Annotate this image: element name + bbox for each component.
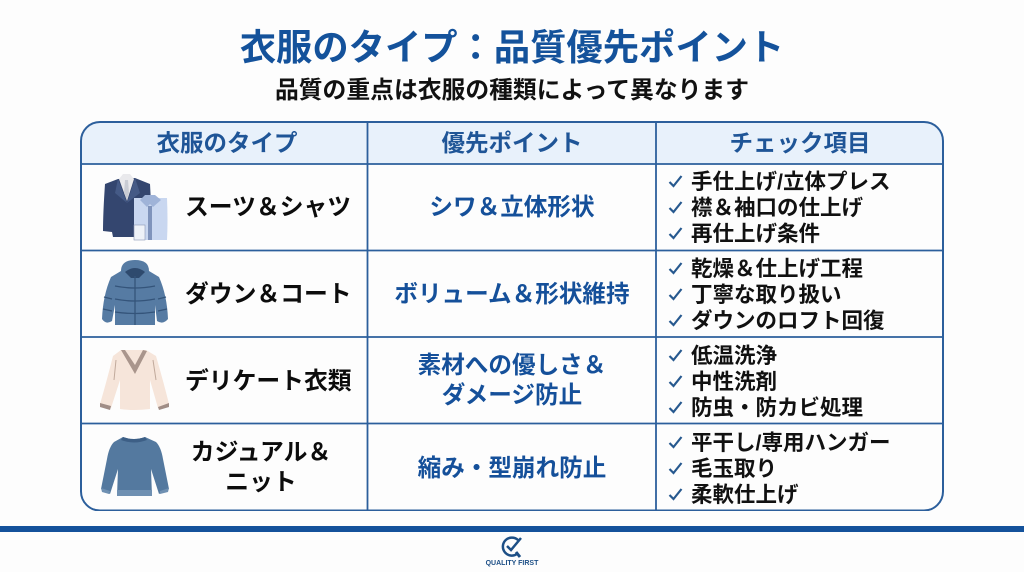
table frame and grid bbox=[80, 121, 944, 511]
title: 衣服のタイプ：品質優先ポイント bbox=[240, 27, 784, 68]
table: garment type quality priorities bbox=[80, 121, 944, 511]
column header: garment type: 衣服のタイプ bbox=[156, 130, 298, 156]
icon: check magnifier bbox=[502, 536, 522, 558]
checklist: down: 乾燥＆仕上げ工程 bbox=[691, 257, 863, 281]
icon: knit sweater bbox=[101, 437, 169, 496]
icon: suit and shirt bbox=[103, 174, 168, 240]
priority: volume and shape retention: ボリューム＆形状維持 bbox=[394, 282, 630, 308]
checklist: down: ダウンのロフト回復 bbox=[691, 309, 885, 333]
checklist: suits bbox=[668, 170, 890, 246]
checklist: suits: 襟＆袖口の仕上げ bbox=[691, 196, 863, 220]
priority: gentleness and damage prevention: 素材への優しさ＆ bbox=[418, 353, 606, 379]
footer bar bbox=[0, 526, 1024, 532]
checklist: delicate: 低温洗浄 bbox=[691, 344, 777, 368]
label: casual and knit: ニット bbox=[225, 469, 297, 496]
label: suits and shirts: スーツ＆シャツ bbox=[185, 194, 351, 221]
icon: down jacket bbox=[102, 260, 168, 325]
checklist: suits: 手仕上げ/立体プレス bbox=[691, 170, 890, 194]
column header: check items: チェック項目 bbox=[730, 130, 870, 156]
subtitle: 品質の重点は衣服の種類によって異なります bbox=[275, 77, 749, 104]
label: casual and knit bbox=[191, 439, 331, 496]
icon: delicate blouse bbox=[100, 350, 169, 410]
label: casual and knit: カジュアル＆ bbox=[191, 439, 331, 466]
checklist: casual bbox=[668, 431, 890, 507]
checklist: casual: 柔軟仕上げ bbox=[691, 483, 799, 507]
checklist: down bbox=[668, 257, 885, 333]
checklist: delicate: 防虫・防カビ処理 bbox=[691, 396, 863, 420]
column header: priority: 優先ポイント bbox=[442, 130, 582, 156]
checklist: delicate: 中性洗剤 bbox=[691, 370, 777, 394]
logo wordmark: QUALITY FIRST bbox=[486, 560, 538, 567]
priority: gentleness and damage prevention bbox=[418, 352, 606, 409]
priority: gentleness and damage prevention: ダメージ防止 bbox=[442, 383, 582, 409]
checklist: suits: 再仕上げ条件 bbox=[691, 222, 820, 246]
footer logo: quality first bbox=[486, 536, 538, 567]
label: delicate garments: デリケート衣類 bbox=[185, 368, 352, 395]
checklist: delicate bbox=[668, 344, 863, 420]
priority: wrinkles and 3D shape: シワ＆立体形状 bbox=[429, 195, 595, 221]
checklist: casual: 平干し/専用ハンガー bbox=[691, 431, 890, 455]
checklist: casual: 毛玉取り bbox=[691, 457, 777, 481]
priority: shrink and shape loss prevention: 縮み・型崩れ防止 bbox=[418, 456, 606, 482]
label: down and coats: ダウン＆コート bbox=[185, 281, 352, 308]
checklist: down: 丁寧な取り扱い bbox=[691, 283, 842, 307]
